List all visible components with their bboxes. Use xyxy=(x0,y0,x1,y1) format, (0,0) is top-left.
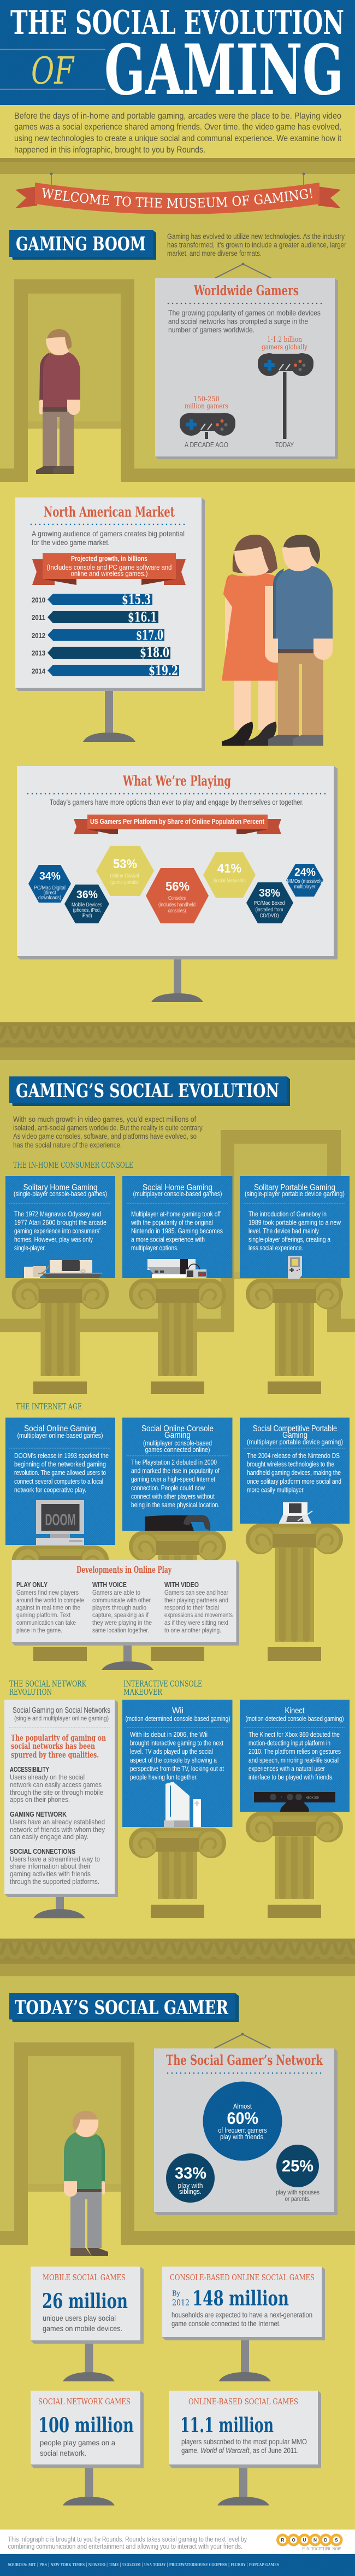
panel: social competitive portable gaming: (multiplayer portable device gaming) xyxy=(247,1438,343,1446)
pedestal column: wii xyxy=(129,1353,226,1918)
column: with video: Gamers can see and hear xyxy=(164,1589,228,1596)
bar chart: projected growth: 2013 xyxy=(32,649,45,657)
sign: online-based social games: players subscribed to the most popular MMO xyxy=(181,2438,307,2446)
subheading: interactive console makeover: INTERACTIVE CONSOLE xyxy=(123,1679,202,1689)
column: play only: gaming platform. Text xyxy=(16,1611,71,1619)
panel: social online console gaming: Gaming xyxy=(164,1431,191,1440)
hexagon: 38% pc/mac boxed: (installed from xyxy=(256,906,283,913)
hexagon: 34% pc/mac digital: 34% xyxy=(39,870,61,882)
pedestal column: social home gaming xyxy=(129,829,226,1394)
footer: brought to you by rounds: combining communication and entertainment and allowing you to interact with your friends. xyxy=(8,2542,242,2550)
banner: welcome to the museum of gaming xyxy=(15,173,341,214)
gaming's social evolution description: With so much growth in video games, you’d expect millions of xyxy=(13,1115,196,1123)
hexagon: 36% mobile devices: Mobile Devices xyxy=(72,902,102,908)
icon: kinect sensor xyxy=(254,1792,335,1812)
sign: online-based social games: ONLINE-BASED SOCIAL GAMES xyxy=(188,2397,298,2407)
callout: popularity of gaming on social networks: social networks has been xyxy=(11,1741,95,1751)
sign: console-based online social games xyxy=(162,2267,325,2381)
sign: mobile social games: 26 million xyxy=(42,2289,128,2313)
hexagon: 24% mmos: multiplayer xyxy=(294,884,316,890)
footer: brought to you by rounds: This infographic is brought to you by Rounds. Rounds takes social gaming to the next level by xyxy=(8,2535,247,2543)
bar chart: projected growth: 2014 xyxy=(32,667,46,675)
subheading: the social network revolution: THE SOCIAL NETWORK xyxy=(9,1679,87,1689)
panel: solitary portable gaming: level. The device had mainly xyxy=(248,1227,319,1235)
circle: almost 60% play with friends: 60% xyxy=(227,2109,258,2128)
panel: social online gaming: beginning of the networked gaming xyxy=(14,1461,106,1468)
heading: north american market: North American Market xyxy=(44,504,175,520)
door frame: social evolution xyxy=(221,1130,341,1332)
panel: wii: Wii xyxy=(172,1706,184,1716)
sign: mobile social games: MOBILE SOCIAL GAMES xyxy=(43,2273,126,2282)
footer: sources xyxy=(0,2554,355,2576)
panel: wii: With its debut in 2006, the Wii xyxy=(130,1731,208,1738)
circle: 25% play with spouses or parents: play with spouses xyxy=(276,2188,319,2196)
panel: solitary portable gaming: Solitary Portable Gaming xyxy=(254,1183,335,1192)
gaming's social evolution description: As video game consoles, software, and platforms have evolved, so xyxy=(13,1132,197,1140)
north american market description: A growing audience of gamers creates big potential xyxy=(32,530,185,538)
hexagon: 53% online casual: 53% xyxy=(113,857,137,871)
circle: 25% play with spouses or parents: 25% xyxy=(282,2157,313,2175)
panel: solitary home gaming: 1977 Atari 2600 brought the arcade xyxy=(14,1219,106,1227)
sign: mobile social games: games on mobile devices. xyxy=(43,2324,122,2333)
panel: social competitive portable gaming: more easily multiplayer. xyxy=(247,1486,305,1494)
figure: gamer in green sweater xyxy=(64,2111,108,2256)
text block: social connections xyxy=(10,1847,100,1886)
hexagon: 34% pc/mac digital: PC/Mac Digital xyxy=(34,885,66,891)
subheading: interactive console makeover xyxy=(123,1679,202,1697)
column: play only: communication can take xyxy=(16,1619,76,1626)
bar chart: projected growth: $16.1 xyxy=(128,609,157,625)
bar chart: projected growth: $15.3 xyxy=(122,592,151,607)
column: with voice: players through audio xyxy=(92,1604,146,1612)
logo: rounds xyxy=(276,2533,343,2551)
worldwide gamers description: number of gamers worldwide. xyxy=(168,326,255,334)
panel: social online console gaming xyxy=(122,1418,233,1531)
header: title: OF xyxy=(31,50,75,93)
column: with voice: communicate with other xyxy=(92,1596,151,1604)
pedestal column: social online console gaming xyxy=(129,1095,226,1661)
panel: wii: level. TV ads played up the social xyxy=(130,1748,213,1755)
panel: solitary home gaming: Solitary Home Gaming xyxy=(23,1183,97,1192)
panel: solitary home gaming: (single-player console-based games) xyxy=(14,1190,107,1198)
chart: controllers on stems: million gamers xyxy=(185,402,228,411)
bar chart: projected growth: $19.2 xyxy=(149,663,178,678)
panel: social online console gaming: connection. People could now xyxy=(131,1484,205,1492)
panel: social home gaming: multiplayer options. xyxy=(131,1244,179,1252)
text block: accessibility: ACCESSIBILITY xyxy=(10,1765,49,1773)
panel: what we're playing: Today’s gamers have more options than ever to play and engage by themselves or together. xyxy=(50,798,304,806)
ribbon: projected growth: online and wireless games.) xyxy=(71,570,147,577)
logo: rounds: O xyxy=(292,2537,295,2543)
subheading: the social network revolution: REVOLUTION xyxy=(9,1687,52,1697)
pedestal column: kinect xyxy=(246,1353,343,1918)
door frame: today's social gamer xyxy=(14,2042,134,2245)
sign: social network games xyxy=(31,2391,144,2505)
sign: mobile social games: unique users play social xyxy=(43,2314,116,2322)
column: play only: against in real-time on the xyxy=(16,1604,80,1612)
column: with video: as if they were sitting next xyxy=(164,1619,229,1626)
chart: controllers on stems: 1-1.2 billion xyxy=(267,336,303,344)
panel: social online console gaming: Social Online Console xyxy=(141,1424,214,1433)
figure: couple looking at sign xyxy=(222,535,333,746)
sign: console-based online social games: households are expected to have a next-generation xyxy=(171,2311,312,2319)
ribbon: projected growth: (Includes console and PC game software and xyxy=(47,564,172,571)
footer: brought to you by rounds xyxy=(0,2530,355,2554)
banner: welcome to the museum of gaming: WELCOME TO THE MUSEUM OF GAMING! xyxy=(42,188,312,208)
circle: 33% play with siblings: play with xyxy=(178,2181,203,2189)
panel: kinect xyxy=(240,1700,350,1812)
sign: mobile social games xyxy=(31,2267,144,2381)
column: with video: WITH VIDEO xyxy=(164,1580,199,1589)
text block: gaming network: GAMING NETWORK xyxy=(10,1810,67,1818)
text block: accessibility: through the site or through mobile xyxy=(10,1789,103,1796)
icon: nes console and controller xyxy=(147,1259,206,1278)
panel: social online console gaming: and marked the rise in popularity of xyxy=(131,1467,220,1475)
panel: social home gaming: with the popularity of the original xyxy=(131,1219,213,1227)
figure: gamer in maroon sweater xyxy=(36,329,80,474)
panel: social online console gaming: being in the same physical location. xyxy=(131,1501,220,1509)
subheading: the social network revolution xyxy=(9,1679,87,1697)
section heading: today's social gamer xyxy=(9,1993,239,2022)
panel: social online gaming xyxy=(5,1418,115,1545)
gaming boom description: market, and more diverse formats. xyxy=(167,249,262,257)
sign: console-based online social games: CONSOLE-BASED ONLINE SOCIAL GAMES xyxy=(170,2273,315,2282)
chart: controllers on stems: gamers globally xyxy=(262,343,308,352)
panel: kinect: Kinect xyxy=(285,1706,305,1716)
panel: social home gaming: Nintendo in 1985. Gaming becomes xyxy=(131,1227,223,1235)
callout: popularity of gaming on social networks xyxy=(11,1733,106,1760)
worldwide gamers description: and social networks has prompted a surge in the xyxy=(168,317,308,326)
logo: rounds: S xyxy=(335,2537,338,2543)
sign: social network games: SOCIAL NETWORK GAMES xyxy=(38,2397,131,2407)
panel: solitary portable gaming: The introduction of Gameboy in xyxy=(248,1210,327,1218)
callout: popularity of gaming on social networks: spurred by three qualities. xyxy=(11,1750,99,1760)
sign: console-based online social games: 148 million xyxy=(192,2286,289,2310)
section heading: gaming's social evolution xyxy=(9,1076,290,1106)
panel: social home gaming: a more social experience with xyxy=(131,1236,205,1243)
panel: solitary home gaming xyxy=(5,1176,115,1278)
panel: solitary home gaming: single-player. xyxy=(14,1244,46,1252)
pedestal column: solitary home gaming xyxy=(12,829,109,1394)
panel: solitary portable gaming: single-player offerings, creating a xyxy=(248,1236,330,1243)
heading: developments in online play: Developments in Online Play xyxy=(76,1565,172,1576)
worldwide gamers description xyxy=(168,309,321,334)
section heading: gaming's social evolution: GAMING’S SOCIAL EVOLUTION xyxy=(16,1080,279,1102)
chart: controllers on stems xyxy=(180,336,313,449)
sign: online-based social games: 11.1 million xyxy=(180,2413,274,2437)
column: with voice: capture, speaking as if xyxy=(92,1611,149,1619)
panel: social home gaming: Social Home Gaming xyxy=(143,1183,212,1192)
panel: wii xyxy=(122,1700,233,1827)
sign: console-based online social games: 2012 xyxy=(172,2298,190,2308)
panel: kinect: and speech, mirroring real-life social xyxy=(248,1757,339,1764)
panel: worldwide gamers xyxy=(155,262,338,459)
panel: solitary home gaming: homes. However, play was only xyxy=(14,1236,93,1243)
panel: social online console gaming: The Playstation 2 debuted in 2000 xyxy=(131,1459,217,1466)
hexagon: 34% pc/mac digital xyxy=(28,865,71,903)
panel: social online gaming: revolution. The game allowed users to xyxy=(14,1469,106,1477)
icon: nintendo ds xyxy=(279,1502,312,1524)
panel: solitary home gaming: gaming experience into consumers’ xyxy=(14,1227,100,1235)
worldwide gamers description: The growing popularity of games on mobile devices xyxy=(168,309,321,317)
sign: online-based social games: game, World of Warcraft, as of June 2011. xyxy=(181,2446,299,2455)
icon: playstation 2 xyxy=(145,1515,210,1531)
section heading: gaming boom xyxy=(9,230,156,260)
circle: almost 60% play with friends xyxy=(203,2082,282,2161)
panel: social gaming on social networks xyxy=(4,1700,118,1918)
logo: rounds: U xyxy=(303,2537,306,2543)
circle: 33% play with siblings xyxy=(166,2153,215,2203)
icon: kinect sensor: XBOX 360 xyxy=(306,1796,319,1800)
intro text xyxy=(14,112,341,155)
column: with voice xyxy=(92,1580,152,1634)
panel: social online gaming: Social Online Gaming xyxy=(24,1424,96,1433)
panel: social online console gaming: gaming over a high-speed Internet xyxy=(131,1476,215,1483)
sign: social network games: people play games on a xyxy=(40,2438,115,2447)
panel: social online console gaming: (multiplayer console-based xyxy=(143,1439,212,1447)
column: with video: respond to their facial xyxy=(164,1604,219,1612)
chart: controllers on stems: A DECADE AGO xyxy=(185,441,228,449)
panel: social home gaming xyxy=(122,1176,233,1278)
panel: kinect: interface to be played with friends. xyxy=(248,1773,334,1781)
hexagon: 24% mmos: MMOs (massively xyxy=(287,879,322,885)
circle: almost 60% play with friends: Almost xyxy=(233,2102,252,2110)
hexagon: 36% mobile devices xyxy=(64,885,109,923)
text block: social connections: through the supported platforms. xyxy=(10,1878,99,1886)
panel: solitary home gaming: The 1972 Magnavox Odyssey and xyxy=(14,1210,101,1218)
circle: 33% play with siblings: siblings. xyxy=(179,2187,202,2196)
panel: social online gaming: (multiplayer online-based games) xyxy=(17,1432,103,1439)
panel: wii: people having fun together. xyxy=(130,1773,198,1781)
intro text: happened in this infographic, brought to you by Rounds. xyxy=(14,145,205,155)
section heading: today's social gamer: TODAY’S SOCIAL GAMER xyxy=(15,1997,229,2019)
column: play only: PLAY ONLY xyxy=(16,1580,48,1589)
hexagon: 41% social networks: 41% xyxy=(217,861,241,875)
column: with voice: Gamers are able to xyxy=(92,1589,140,1596)
hexagon: 56% consoles: (includes handheld xyxy=(158,901,196,908)
icon: game boy xyxy=(288,1256,302,1279)
sign: social network games: 100 million xyxy=(38,2413,134,2437)
hexagon: 41% social networks: Social Networks xyxy=(213,877,246,884)
callout: popularity of gaming on social networks: The popularity of gaming on xyxy=(11,1733,106,1743)
text block: social connections: share information about their xyxy=(10,1863,91,1870)
hexagon: 36% mobile devices: 36% xyxy=(76,889,98,901)
panel: social competitive portable gaming: Gaming xyxy=(282,1431,307,1440)
column: play only xyxy=(16,1580,84,1634)
panel: social competitive portable gaming: brought wireless technologies to the xyxy=(247,1461,334,1468)
section heading: gaming boom: GAMING BOOM xyxy=(16,233,146,255)
hexagon: 38% pc/mac boxed: 38% xyxy=(259,887,280,899)
heading: worldwide gamers: Worldwide Gamers xyxy=(193,283,299,298)
panel: wii: brought interactive gaming to the next xyxy=(130,1740,223,1747)
hexagon: 34% pc/mac digital: (direct xyxy=(44,890,56,896)
hexagon: 56% consoles: consoles) xyxy=(168,908,186,914)
hexagon: 41% social networks xyxy=(203,852,256,898)
hexagon: 24% mmos xyxy=(286,864,323,897)
panel: the social gamer's network xyxy=(154,2033,338,2215)
hexagon: 34% pc/mac digital: downloads) xyxy=(38,895,61,901)
column: with video: to one another playing. xyxy=(164,1626,221,1634)
text block: accessibility: apps on their phones. xyxy=(10,1796,70,1804)
pedestal column: solitary portable gaming xyxy=(246,829,343,1394)
bar chart: projected growth: $17.0 xyxy=(136,627,163,643)
logo: rounds: R xyxy=(281,2537,285,2543)
ribbon: us gamers per platform: US Gamers Per Platform by Share of Online Population Percent xyxy=(90,817,265,826)
panel: social gaming on social networks: (single and multiplayer online gaming) xyxy=(14,1714,109,1722)
column: with voice: same location together. xyxy=(92,1626,149,1634)
subheading: the internet age: THE INTERNET AGE xyxy=(16,1402,82,1412)
text block: gaming network: Users have an already established xyxy=(10,1818,105,1826)
column: play only: Gamers find new players xyxy=(16,1589,79,1596)
circle: almost 60% play with friends: play with friends. xyxy=(220,2133,265,2141)
column: play only: around the world to compete xyxy=(16,1596,84,1604)
column: with voice: they were playing in the xyxy=(92,1619,152,1626)
chart: controllers on stems: 150-250 xyxy=(193,395,220,403)
gaming boom description xyxy=(167,232,346,257)
hexagon: 36% mobile devices: (phones, iPod, xyxy=(73,908,100,914)
ribbon: projected growth xyxy=(32,553,186,585)
hexagon: 38% pc/mac boxed: PC/Mac Boxed xyxy=(253,900,285,906)
heading: what we're playing: What We’re Playing xyxy=(122,773,231,789)
text block: social connections: SOCIAL CONNECTIONS xyxy=(10,1847,75,1855)
panel: social online console gaming: games connected online) xyxy=(145,1446,210,1454)
text block: gaming network: network of friends with whom they xyxy=(10,1826,105,1834)
bar chart: projected growth xyxy=(32,592,179,678)
hexagon: 56% consoles: Consoles xyxy=(168,895,186,901)
panel: social home gaming: Multiplayer at-home gaming took off xyxy=(131,1210,221,1218)
hexagon: 38% pc/mac boxed xyxy=(246,882,293,923)
subheading: the in-home consumer console: THE IN-HOME CONSUMER CONSOLE xyxy=(13,1160,133,1170)
pedestal column: social competitive portable gaming xyxy=(246,1095,343,1661)
panel: social online gaming: network for cooperative play. xyxy=(14,1486,86,1494)
column: with voice: WITH VOICE xyxy=(92,1580,127,1589)
text block: accessibility: Users already on the social xyxy=(10,1773,85,1781)
gaming's social evolution description: has the social nature of the experience. xyxy=(13,1141,122,1149)
circle: 33% play with siblings: 33% xyxy=(175,2164,206,2182)
ribbon: us gamers per platform xyxy=(74,815,281,834)
panel: what we're playing xyxy=(17,766,338,1002)
column: with video: expressions and movements xyxy=(164,1611,233,1619)
panel: solitary portable gaming xyxy=(240,1176,350,1279)
panel: social online gaming: DOOM’s release in 1993 sparked the xyxy=(14,1452,109,1460)
panel: wii: (motion-determined console-based gaming) xyxy=(126,1715,230,1723)
gaming's social evolution description: isolated, anti-social gamers worldwide. But the reality is quite contrary. xyxy=(13,1124,204,1132)
column: with video: their playing partners and xyxy=(164,1596,228,1604)
logo: rounds: N xyxy=(313,2537,317,2543)
panel: social competitive portable gaming xyxy=(240,1418,350,1524)
bar chart: projected growth: 2012 xyxy=(32,631,45,640)
text block: gaming network: can easily engage and play. xyxy=(10,1833,88,1841)
sign: social network games: social network. xyxy=(40,2449,86,2457)
hexagon: 53% online casual: (game portals) xyxy=(110,879,139,886)
chart: controllers on stems: TODAY xyxy=(275,441,294,449)
bar chart: projected growth: $18.0 xyxy=(140,645,169,660)
icon: doom computer xyxy=(36,1500,84,1545)
column: play only: place in the game. xyxy=(16,1626,62,1634)
text block: gaming network xyxy=(10,1810,105,1841)
sign: online-based social games xyxy=(169,2391,321,2505)
header: title xyxy=(0,0,355,110)
circle: 25% play with spouses or parents xyxy=(276,2145,319,2203)
icon: doom computer: DOOM xyxy=(45,1511,75,1529)
text block: accessibility xyxy=(10,1765,103,1804)
door frame: gaming boom xyxy=(14,279,134,482)
circle: almost 60% play with friends: of frequent gamers xyxy=(218,2126,267,2134)
panel: north american market xyxy=(15,497,205,742)
text block: social connections: gaming activities with friends xyxy=(10,1870,91,1878)
panel: social home gaming: (multiplayer console-based games) xyxy=(133,1190,222,1198)
icon: wii console and remote xyxy=(164,1782,201,1827)
text block: social connections: Users have a streamlined way to xyxy=(10,1855,100,1863)
panel: social online gaming: connect several computers to a local xyxy=(14,1478,103,1485)
hexagon: 53% online casual: Online Casual xyxy=(110,873,139,879)
panel: developments in online play xyxy=(12,1560,239,1670)
ribbon: projected growth: Projected growth, in billions xyxy=(71,555,147,563)
sign: console-based online social games: game console connected to the Internet. xyxy=(171,2320,281,2328)
hexagon: 24% mmos: 24% xyxy=(294,867,316,879)
logo: rounds: FUN. TOGETHER. NOW. xyxy=(302,2546,341,2551)
logo: rounds: D xyxy=(324,2537,328,2543)
panel: wii: perspective from the TV, looking out at xyxy=(130,1765,224,1772)
panel: solitary portable gaming: less social experience. xyxy=(248,1244,303,1252)
icon: atari 2600 console xyxy=(24,1260,102,1278)
subheading: interactive console makeover: MAKEOVER xyxy=(123,1687,163,1697)
panel: social gaming on social networks: Social Gaming on Social Networks xyxy=(13,1706,110,1715)
hexagon: 38% pc/mac boxed: CD/DVD) xyxy=(260,912,279,919)
panel: kinect: motion-detecting input platform in xyxy=(248,1740,330,1747)
panel: wii: aspect of the console by showing a xyxy=(130,1757,217,1764)
north american market description xyxy=(32,530,185,547)
north american market description: for the video game market. xyxy=(32,538,110,547)
sign: console-based online social games: By xyxy=(172,2290,181,2298)
gaming's social evolution description xyxy=(13,1115,204,1149)
hexagon: 56% consoles xyxy=(146,868,209,923)
hexagon: 53% online casual xyxy=(96,846,154,896)
circle: 25% play with spouses or parents: or parents. xyxy=(285,2195,310,2203)
hexagon: 36% mobile devices: iPad) xyxy=(82,913,92,919)
bar chart: projected growth: 2011 xyxy=(32,613,45,622)
panel: solitary portable gaming: 1989 took portable gaming to a new xyxy=(248,1219,341,1227)
panel: social online console gaming: connect with other players without xyxy=(131,1492,215,1500)
column: with video xyxy=(164,1580,233,1634)
panel: kinect: experiences with a natural user xyxy=(248,1765,325,1772)
text block: accessibility: network can easily access games xyxy=(10,1781,102,1789)
pedestal column: social online gaming xyxy=(12,1096,109,1661)
bar chart: projected growth: 2010 xyxy=(32,596,45,604)
hexagon: 56% consoles: 56% xyxy=(165,879,190,893)
